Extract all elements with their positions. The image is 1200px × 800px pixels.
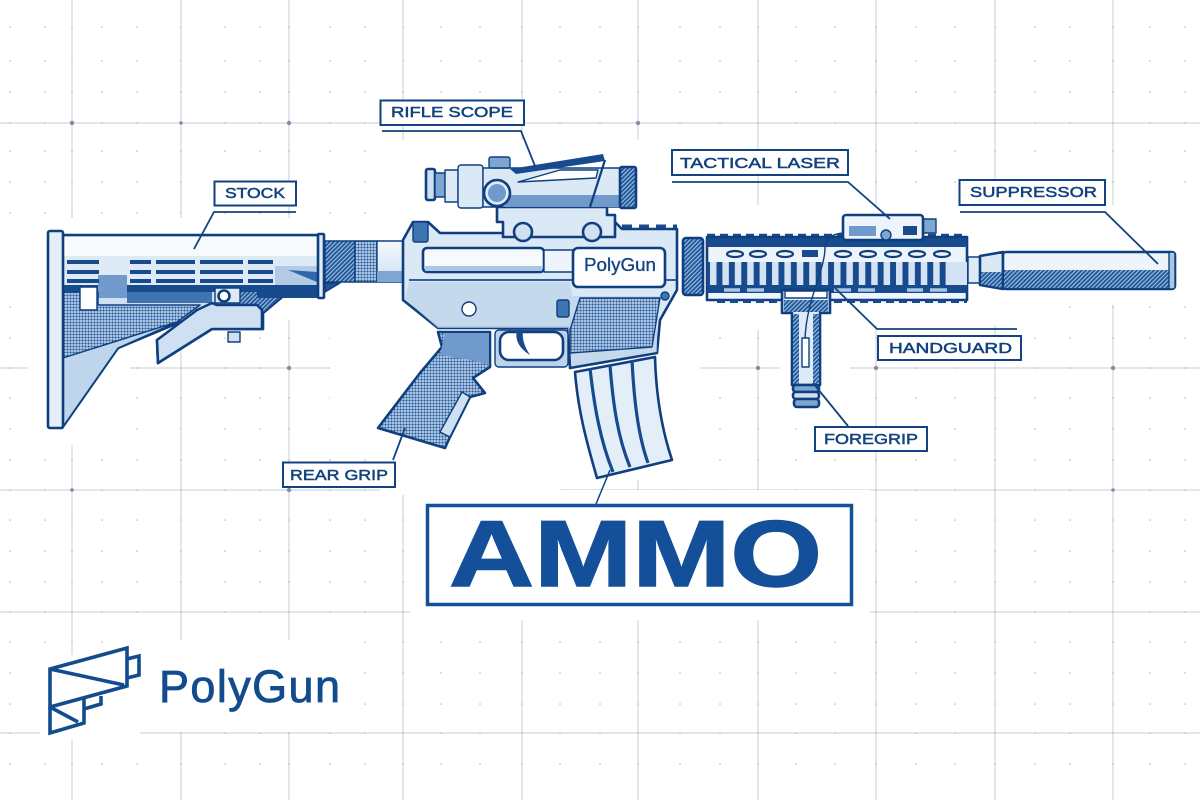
label: ammo <box>428 470 852 606</box>
label: rear grip: REAR GRIP <box>290 467 388 484</box>
trigger guard <box>495 330 568 367</box>
receiver <box>403 222 677 368</box>
tactical laser <box>802 215 936 367</box>
rifle illustration <box>48 154 1175 478</box>
label: rear grip <box>283 428 405 487</box>
label: stock: STOCK <box>225 185 285 202</box>
logo icon: PolyGun <box>50 648 139 733</box>
label: stock <box>194 182 296 249</box>
PolyGun receiver plate: PolyGun <box>584 255 656 275</box>
suppressor <box>968 252 1175 289</box>
stock <box>48 231 324 428</box>
front ring <box>683 238 703 295</box>
label: suppressor <box>960 180 1158 264</box>
handguard <box>707 236 967 302</box>
label: handguard <box>835 288 1021 360</box>
logo wordmark: PolyGun: PolyGun <box>159 661 340 712</box>
label: foregrip: FOREGRIP <box>824 431 918 448</box>
PolyGun receiver plate <box>573 248 665 287</box>
label: foregrip <box>813 383 927 451</box>
magazine <box>575 357 672 478</box>
label: tactical laser: TACTICAL LASER <box>680 155 840 172</box>
label: rifle scope: RIFLE SCOPE <box>391 104 513 121</box>
label: handguard: HANDGUARD <box>889 340 1012 357</box>
label: tactical laser <box>672 150 890 219</box>
rifle scope <box>426 154 636 208</box>
white clearing around the drawing <box>28 140 1190 495</box>
buffer tube <box>325 241 404 292</box>
foregrip <box>782 290 830 407</box>
scope mount <box>497 207 615 241</box>
label: suppressor: SUPPRESSOR <box>970 184 1097 201</box>
pistol grip (rear grip) <box>378 332 490 448</box>
label: ammo: AMMO <box>449 501 822 606</box>
label: rifle scope <box>380 100 535 166</box>
